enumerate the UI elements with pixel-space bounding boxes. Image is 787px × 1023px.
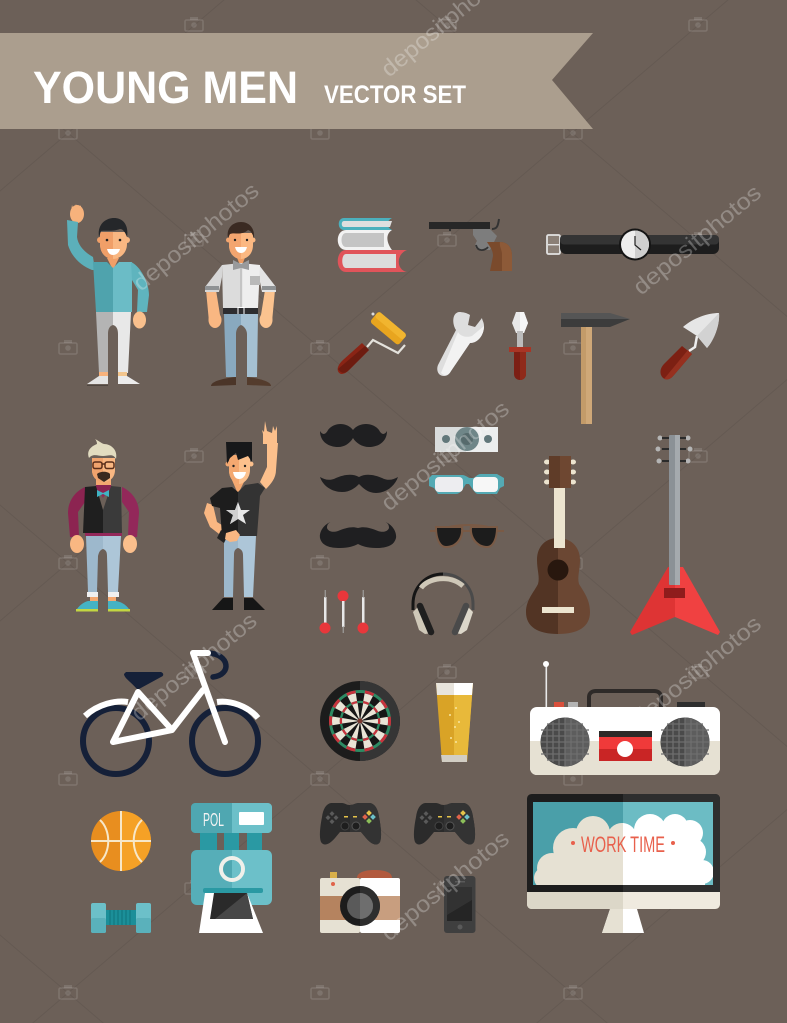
- watermarks: depositphotos: [128, 177, 264, 296]
- character: man in teal sweater waving: [67, 204, 149, 386]
- watermarks: depositphotos: [376, 825, 514, 946]
- icon: revolver: [429, 219, 512, 271]
- character: rocker with star t-shirt: [204, 421, 278, 610]
- icon: garden trowel: [660, 313, 719, 380]
- icon: retro camera: [320, 870, 400, 933]
- icon: darts: [320, 590, 368, 634]
- watermarks: depositphotos: [126, 607, 262, 726]
- icon: glass of beer: [436, 683, 473, 762]
- watermarks: depositphotos: [628, 179, 766, 300]
- icon: hammer: [561, 313, 630, 424]
- watermarks: depositphotos: [628, 610, 766, 731]
- icon: game controller right: [414, 803, 475, 845]
- icon: paint roller: [338, 311, 407, 374]
- icon: screwdriver: [509, 312, 531, 380]
- icon: mustache two: [320, 475, 398, 493]
- icon: bicycle: [83, 653, 258, 774]
- icon: boombox radio: [530, 661, 720, 775]
- icon: dartboard: [320, 681, 400, 761]
- title: YOUNG MEN: [33, 62, 298, 113]
- icon: electric flying-V guitar: [630, 435, 720, 635]
- character: hipster with bow tie: [68, 439, 139, 612]
- watermarks: [126, 0, 766, 946]
- title banner: [0, 33, 593, 129]
- icon: aviator sunglasses: [430, 525, 504, 548]
- watermarks: depositphotos: [376, 395, 514, 516]
- icon: basketball: [91, 811, 151, 871]
- icon: teal glasses: [429, 474, 504, 494]
- icon: wrench: [437, 312, 484, 376]
- icon: polaroid camera: [191, 803, 272, 933]
- icon: game controller left: [320, 803, 381, 845]
- icon: dumbbell: [91, 903, 151, 933]
- icon: desktop monitor with work time: [527, 794, 720, 933]
- icon: ukulele: [526, 456, 590, 634]
- icon: mustache one: [320, 424, 387, 447]
- icon: smartphone: [444, 876, 476, 933]
- subtitle: VECTOR SET: [324, 81, 466, 109]
- icon: mustache three: [320, 522, 396, 548]
- icon: headphones: [413, 574, 473, 634]
- icon: banknote: [435, 427, 498, 452]
- character: man in grey shirt and jeans: [205, 222, 276, 386]
- screen text: WORK TIME: [581, 832, 665, 857]
- icon: wrist watch: [547, 228, 719, 260]
- polaroid label: POL: [203, 810, 224, 830]
- icon: stack of books: [338, 218, 407, 272]
